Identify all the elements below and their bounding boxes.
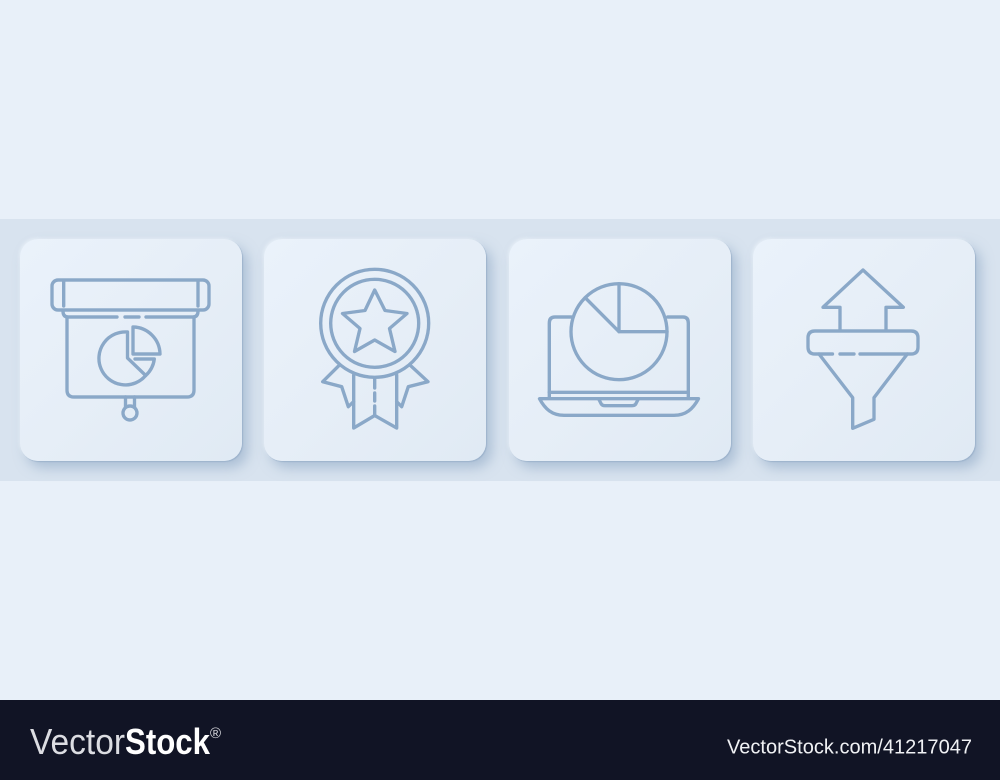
panel: medal card bbox=[264, 239, 486, 461]
icon: projection screen with pie chart bbox=[52, 280, 209, 420]
icon: laptop with pie chart bbox=[540, 284, 698, 415]
panel: laptop card bbox=[508, 239, 730, 461]
background band bbox=[0, 219, 1000, 481]
footer bar bbox=[0, 700, 1000, 780]
VectorStock logo and image id bbox=[30, 721, 972, 762]
image id: VectorStock.com/41217047 bbox=[727, 736, 972, 758]
panel: presentation card bbox=[20, 239, 242, 461]
icon: funnel with up arrow bbox=[808, 270, 918, 428]
registered mark: ® bbox=[210, 725, 221, 742]
icon: medal with star bbox=[321, 269, 429, 428]
panel: funnel card bbox=[753, 239, 975, 461]
logo wordmark bold: Stock bbox=[125, 721, 211, 762]
logo wordmark: Vector bbox=[30, 721, 125, 762]
